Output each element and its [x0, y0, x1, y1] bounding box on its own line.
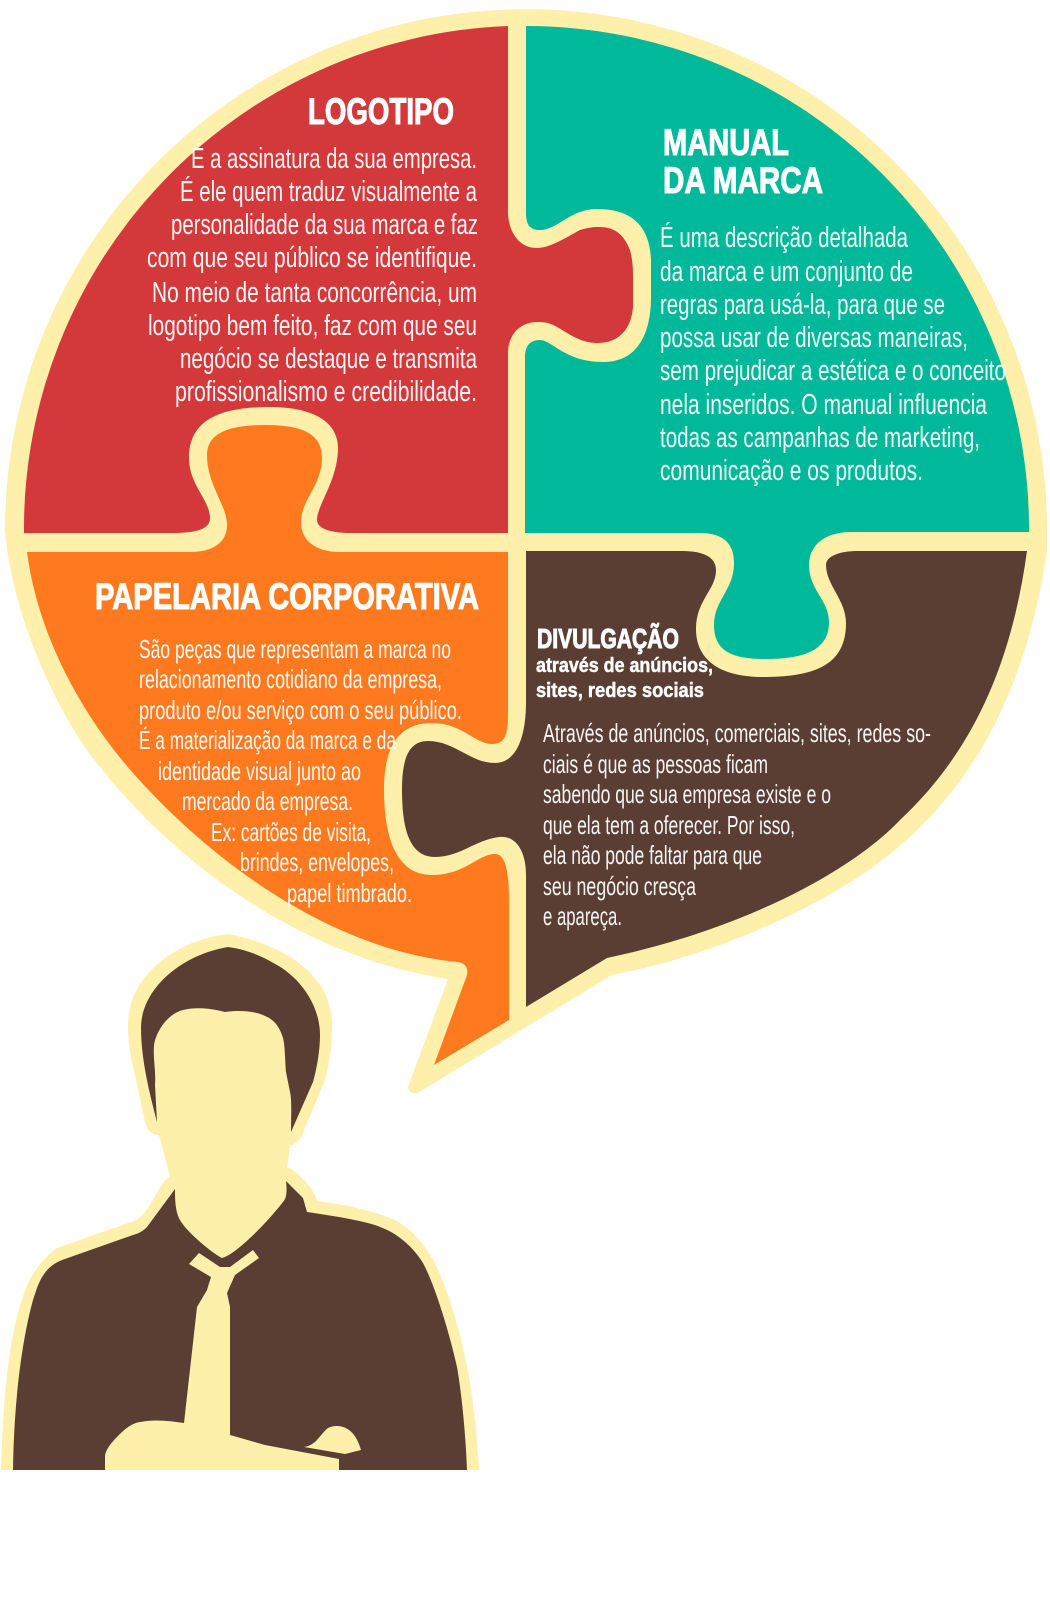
text block: divulgacao description: ciais é que as pessoas ficam — [543, 749, 768, 779]
man tie and arm — [105, 1250, 339, 1470]
text block: divulgacao description: que ela tem a oferecer. Por isso, — [543, 810, 795, 840]
man jacket — [13, 1181, 467, 1470]
text block: logotipo description: No meio de tanta concorrência, um — [152, 277, 477, 309]
text block: logotipo description: com que seu público se identifique. — [147, 242, 477, 274]
panel: logotipo — [24, 26, 633, 533]
subheading: divulgacao channels: sites, redes sociais — [536, 680, 704, 702]
text block: papelaria description: É a materialização da marca e da — [139, 725, 396, 755]
man hair — [141, 947, 320, 1132]
text block: logotipo description: logotipo bem feito, faz com que seu — [148, 310, 477, 342]
man hand — [304, 1426, 361, 1454]
man outline and face — [1, 934, 479, 1470]
text block: papelaria description: São peças que representam a marca no — [139, 634, 451, 664]
subheading: divulgacao channels — [536, 655, 713, 702]
text block: logotipo description: É a assinatura da sua empresa. — [191, 142, 477, 175]
heading: manual da marca: DA MARCA — [663, 160, 823, 201]
text block: manual description: comunicação e os produtos. — [660, 455, 923, 487]
panel: papelaria corporativa — [27, 425, 509, 1065]
text block: papelaria description — [139, 634, 462, 908]
text block: papelaria description: papel timbrado. — [287, 878, 412, 908]
text block: logotipo description — [147, 142, 478, 408]
heading: papelaria corporativa: PAPELARIA CORPORATIVA — [95, 576, 479, 617]
text block: divulgacao description — [543, 718, 931, 931]
text block: divulgacao description: e apareça. — [543, 901, 622, 931]
text block: papelaria description: Ex: cartões de visita, — [211, 817, 371, 847]
text block: divulgacao description: seu negócio cresça — [543, 871, 696, 901]
text block: logotipo description: profissionalismo e credibilidade. — [175, 376, 477, 408]
text block: papelaria description: mercado da empresa. — [182, 786, 353, 816]
heading: logotipo: LOGOTIPO — [308, 91, 454, 132]
icon: man with crossed arms — [1, 934, 479, 1470]
speech bubble outline with tail — [5, 9, 1047, 1093]
heading: divulgacao: DIVULGAÇÃO — [537, 623, 679, 654]
panel: manual da marca — [525, 26, 1029, 659]
text block: manual description: É uma descrição detalhada — [660, 221, 909, 254]
text block: logotipo description: É ele quem traduz visualmente a — [180, 175, 478, 208]
panel: divulgacao — [402, 551, 1027, 1007]
red puzzle piece — [24, 26, 633, 533]
brown puzzle piece — [402, 551, 1027, 1007]
text block: manual description — [660, 221, 1006, 487]
text block: divulgacao description: ela não pode faltar para que — [543, 840, 762, 870]
subheading: divulgacao channels: através de anúncios, — [536, 655, 713, 677]
text block: papelaria description: brindes, envelopes, — [240, 847, 394, 877]
text block: manual description: da marca e um conjunto de — [660, 256, 913, 288]
heading: manual da marca: MANUAL — [663, 122, 789, 163]
text block: logotipo description: negócio se destaque e transmita — [180, 343, 478, 375]
text block: logotipo description: personalidade da sua marca e faz — [171, 209, 478, 241]
text block: papelaria description: produto e/ou serviço com o seu público. — [139, 695, 462, 725]
text block: papelaria description: relacionamento cotidiano da empresa, — [139, 664, 442, 694]
orange puzzle piece — [27, 425, 509, 1065]
text block: divulgacao description: sabendo que sua empresa existe e o — [543, 779, 831, 809]
teal puzzle piece — [525, 26, 1029, 659]
text block: papelaria description: identidade visual junto ao — [158, 756, 361, 786]
heading: manual da marca — [663, 122, 823, 201]
